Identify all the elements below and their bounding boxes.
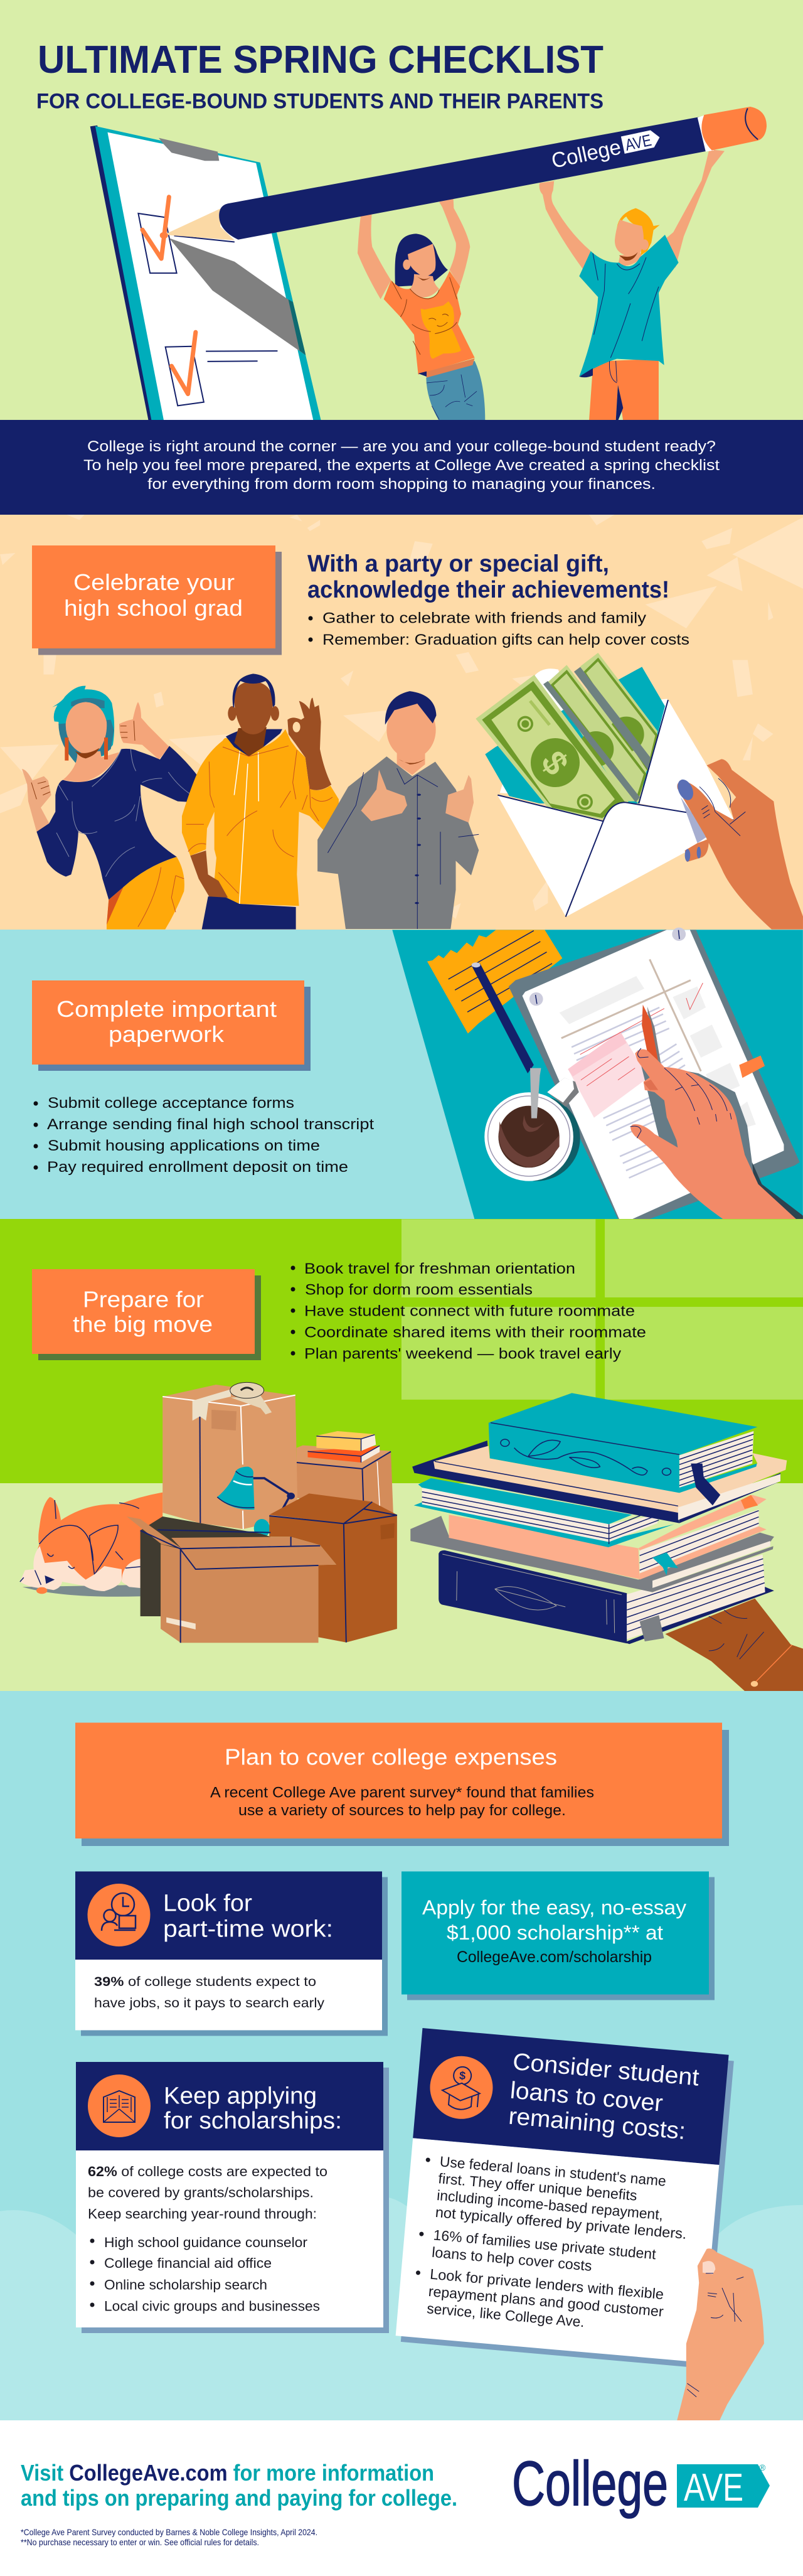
bullet list [34,1095,374,1176]
bullet list: Have student connect with future roommate [304,1303,635,1319]
pencil logo: College [550,135,623,173]
section tag [32,545,275,648]
illustration: man in gray shirt [317,691,479,929]
section tag: paperwork [109,1021,225,1047]
card: consider student loans: not typically offered by private lenders. [435,2204,688,2242]
intro text: for everything from dorm room shopping to managing your finances. [147,476,656,493]
shadow of expense banner [82,1730,729,1846]
panel: plan to cover college expenses [0,1691,803,2420]
shadow of section tag [38,552,282,655]
card: consider student loans: repayment plans and good customer [428,2283,664,2320]
card: part-time work: Look for [163,1891,252,1917]
bullet list: Coordinate shared items with their roommate [304,1324,646,1341]
section tag: the big move [73,1311,213,1337]
panel: intro band [0,420,803,515]
card: consider student loans: loans to cover [509,2078,664,2117]
bullet list: Remember: Graduation gifts can help cover costs [322,631,689,648]
section tag: Prepare for [83,1287,204,1312]
section tag [32,980,304,1065]
heading: With a party or special gift, [307,551,609,577]
shadow of scholarships card [82,2068,389,2333]
card: part-time work [75,1872,382,2030]
illustration: giant pencil [160,107,767,240]
card: keep applying for scholarships: College financial aid office [104,2255,272,2271]
card: part-time work: part-time work: [163,1916,333,1942]
card: consider student loans: 16% of families use private student [433,2226,657,2262]
section tag: Complete important [56,996,277,1022]
bullet list [309,610,689,648]
illustration: girl holding pencil [358,199,485,421]
card: part-time work: 39% of college students expect to [94,1974,316,1989]
call to action: and tips on preparing and paying for college. [21,2485,457,2511]
illustration: clipboard with checklist [90,126,321,421]
bullet list: Pay required enrollment deposit on time [47,1159,348,1176]
card: consider student loans [395,2028,735,2369]
expense banner [75,1722,722,1838]
illustration: desk with paperwork [392,928,803,1219]
card: keep applying for scholarships: be covered by grants/scholarships. [88,2184,314,2201]
card: consider student loans: service, like College Ave. [426,2300,585,2330]
section tag: Celebrate your [73,569,235,595]
shadow of scholarship card [407,1877,715,2000]
card: consider student loans: Consider student [512,2049,701,2091]
icon: envelope with book [88,2074,151,2137]
subtitle: FOR COLLEGE-BOUND STUDENTS AND THEIR PARENTS [36,89,604,113]
bullet list: Submit college acceptance forms [48,1095,294,1112]
panel: hero [0,0,803,421]
logo: College Ave: College [512,2449,668,2519]
bullet list: Plan parents' weekend — book travel early [304,1346,621,1362]
illustration: hand holding card [677,2248,764,2420]
card: keep applying for scholarships: for scholarships: [164,2108,342,2134]
card: no-essay scholarship: Apply for the easy, no-essay [422,1896,686,1919]
pencil logo [550,127,662,173]
heading [307,551,669,603]
card: keep applying for scholarships: Keep searching year-round through: [88,2206,317,2222]
card: no-essay scholarship [402,1872,709,1995]
icon: dollar coin and graduation cap [427,2054,496,2122]
expense banner: A recent College Ave parent survey* found that families [210,1784,594,1801]
call to action: Visit CollegeAve.com for more information [21,2460,434,2486]
panel: celebrate your high school grad [0,515,803,930]
logo: College Ave: ® [759,2462,766,2472]
footnotes: **No purchase necessary to enter or win. See official rules for details. [21,2537,259,2547]
card: consider student loans: including income-based repayment, [436,2187,664,2223]
pencil logo: AVE [624,131,653,154]
section tag [32,1269,255,1354]
intro text: To help you feel more prepared, the experts at College Ave created a spring checklist [83,457,720,474]
expense banner: Plan to cover college expenses [225,1744,557,1770]
section tag: high school grad [64,595,243,621]
bullet list: Submit housing applications on time [48,1137,320,1154]
card: keep applying for scholarships: High school guidance counselor [104,2235,307,2250]
title: ULTIMATE SPRING CHECKLIST [38,38,604,82]
bullet list: Shop for dorm room essentials [305,1282,533,1298]
expense banner: use a variety of sources to help pay for college. [238,1802,566,1819]
bullet list: Arrange sending final high school transcript [47,1116,374,1133]
call to action [21,2460,457,2511]
card: consider student loans: remaining costs: [508,2103,687,2145]
footnotes [21,2527,317,2547]
illustration: stack of books with hand [410,1393,803,1691]
illustration: boy holding pencil [540,149,725,421]
card: keep applying for scholarships: Online scholarship search [104,2277,267,2292]
card: keep applying for scholarships: 62% of college costs are expected to [88,2164,327,2179]
illustration: man in yellow hoodie [182,674,339,930]
card: no-essay scholarship: $1,000 scholarship** at [447,1921,663,1944]
bullet list: Book travel for freshman orientation [304,1260,575,1277]
card: consider student loans: Look for private lenders with flexible [429,2266,664,2302]
panel: prepare for the big move [0,1219,803,1691]
bullet list [291,1260,646,1362]
illustration: woman with thumbs up [22,686,209,930]
card: keep applying for scholarships [76,2062,383,2327]
panel: complete important paperwork [0,928,803,1219]
card: part-time work: have jobs, so it pays to search early [94,1995,324,2010]
footnotes: *College Ave Parent Survey conducted by Barnes & Noble College Insights, April 2024. [21,2527,317,2537]
icon: dollar coin and graduation cap: $ [459,2069,466,2082]
text in figure: dollar sign: $ [534,744,577,781]
intro text [83,438,720,493]
card: consider student loans: first. They offer unique benefits [438,2170,638,2204]
intro text: College is right around the corner — are you and your college-bound student ready? [87,438,716,455]
card: keep applying for scholarships: Keep applying [164,2083,317,2109]
shadow of section tag [38,987,311,1071]
icon: clock, person and laptop [88,1884,151,1946]
illustration: moving boxes, corgi and lamp [20,1382,397,1643]
shadow of part-time card [81,1877,388,2036]
logo: College Ave: AVE [684,2466,743,2509]
bullet list: Gather to celebrate with friends and family [322,610,646,626]
card: consider student loans: Use federal loans in student's name [439,2153,667,2189]
card: consider student loans: loans to help cover costs [431,2244,593,2274]
panel: footer [0,2420,803,2576]
card: no-essay scholarship: CollegeAve.com/scholarship [457,1948,652,1966]
heading: acknowledge their achievements! [307,577,669,603]
illustration: envelope with cash in hand [476,653,803,930]
shadow of section tag [38,1275,261,1360]
card: keep applying for scholarships: Local civic groups and businesses [104,2299,320,2314]
